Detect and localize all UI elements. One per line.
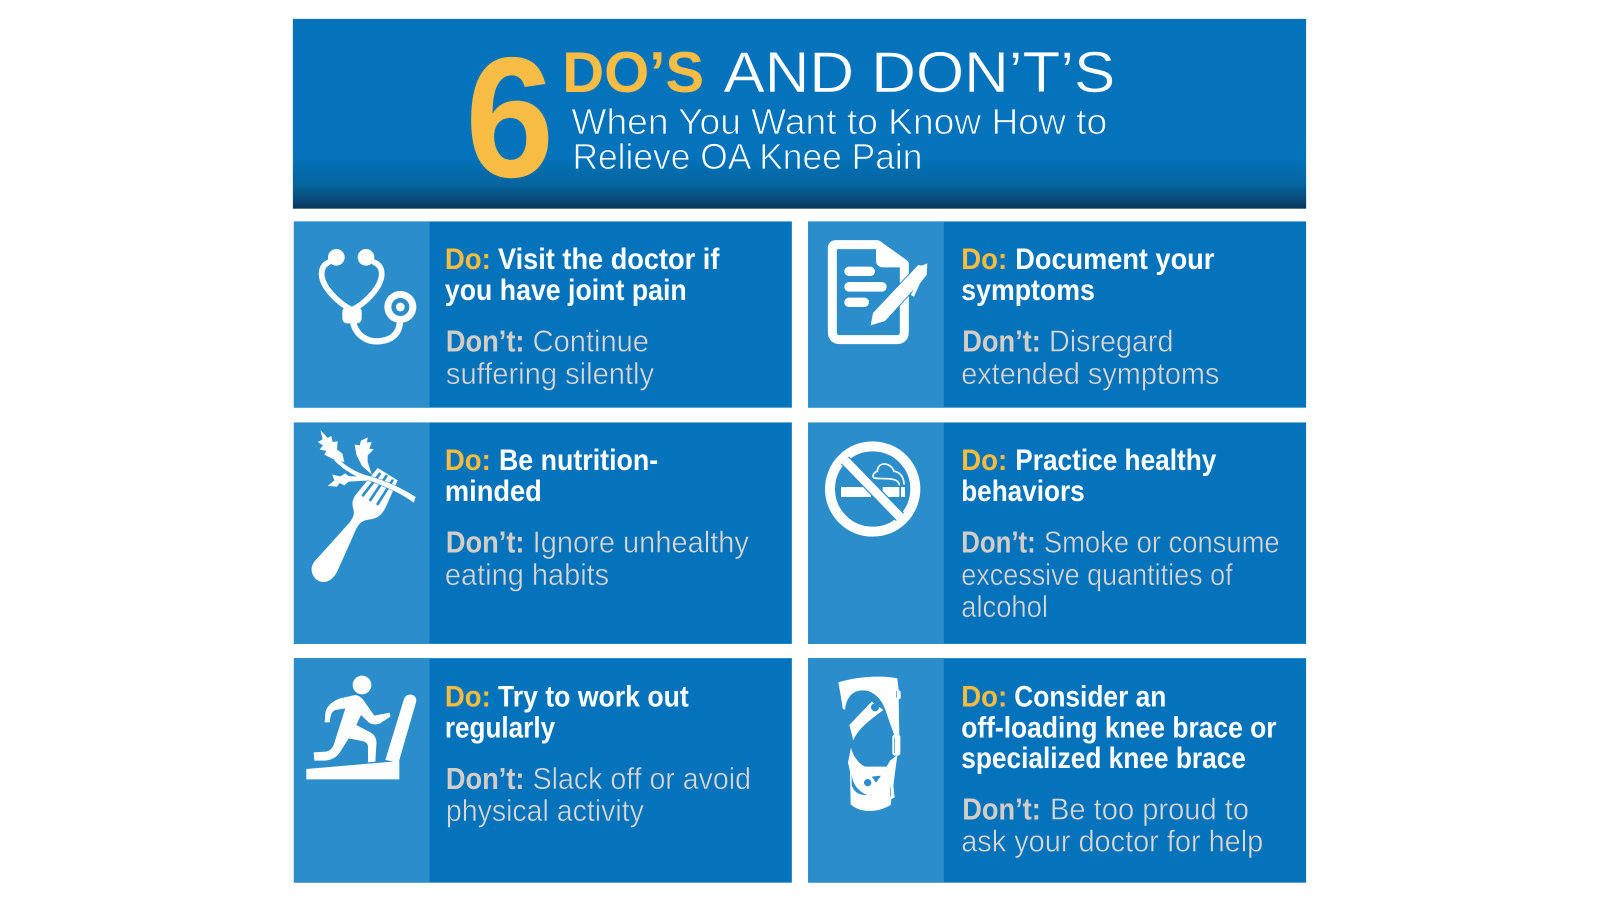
text: healthy behaviors: Don’t: [961,527,1036,560]
card: healthy behaviors [808,422,1306,644]
text: nutrition: eating habits [445,559,609,592]
text: healthy behaviors: alcohol [961,591,1048,624]
text: work out: Slack off or avoid [533,763,751,796]
icon: stethoscope [322,249,416,341]
text: document symptoms: Document your [1015,243,1215,276]
icon: fork with herb [312,430,416,582]
text: document symptoms: symptoms [961,274,1095,307]
text: visit the doctor [445,243,720,391]
text: document symptoms: Do: [961,243,1007,276]
text: healthy behaviors: Smoke or consume [1044,527,1280,560]
text: document symptoms: Don’t: [962,326,1041,359]
text: visit the doctor: suffering silently [446,358,654,391]
text: work out: Don’t: [446,763,524,796]
text: healthy behaviors: behaviors [961,475,1085,508]
text: nutrition: Don’t: [446,527,524,560]
text: healthy behaviors [961,444,1280,624]
text: work out [445,680,751,828]
text: work out: Do: [445,680,491,713]
subtitle: When You Want to Know How to [571,102,1107,142]
text: document symptoms [961,243,1219,391]
text: work out: physical activity [446,795,644,828]
icon: knee brace [838,677,901,811]
icon: document and pen [832,241,927,340]
text: healthy behaviors: Practice healthy [1015,444,1217,477]
text: nutrition [445,444,749,592]
text: work out: regularly [445,711,556,744]
text: visit the doctor: you have joint pain [445,274,687,307]
card: visit the doctor [294,221,792,408]
title [562,41,1115,105]
text: visit the doctor: Visit the doctor if [498,243,720,276]
text: nutrition: Do: [445,444,491,477]
card: nutrition [294,422,792,644]
title: DO’S [562,41,704,105]
card: knee brace [808,658,1306,883]
card: work out [294,658,792,883]
text: nutrition: Ignore unhealthy [533,527,749,560]
big numeral 6: 6 [465,23,554,214]
text: knee brace: Don’t: [962,794,1041,827]
text: healthy behaviors: Do: [961,444,1007,477]
text: document symptoms: Disregard [1049,326,1173,359]
icon: no smoking [830,446,915,532]
text: knee brace [961,680,1277,859]
icon: treadmill runner [306,676,416,779]
text: knee brace: off-loading knee brace or [961,711,1277,744]
text: visit the doctor: Do: [445,243,491,276]
text: knee brace: Consider an [1014,680,1166,713]
text: document symptoms: extended symptoms [961,358,1219,391]
text: knee brace: ask your doctor for help [961,826,1263,859]
text: nutrition: minded [445,475,542,508]
text: visit the doctor: Don’t: [446,326,524,359]
text: knee brace: specialized knee brace [961,742,1246,775]
text: knee brace: Do: [961,680,1007,713]
text: knee brace: Be too proud to [1050,794,1249,827]
subtitle: Relieve OA Knee Pain [572,137,922,177]
header banner [293,19,1306,214]
text: visit the doctor: Continue [533,326,649,359]
card: document symptoms [808,221,1306,408]
text: nutrition: Be nutrition- [499,444,658,477]
text: work out: Try to work out [498,680,689,713]
text: healthy behaviors: excessive quantities of [961,559,1233,592]
subtitle [571,102,1107,177]
title: AND DON’T’S [723,41,1115,105]
